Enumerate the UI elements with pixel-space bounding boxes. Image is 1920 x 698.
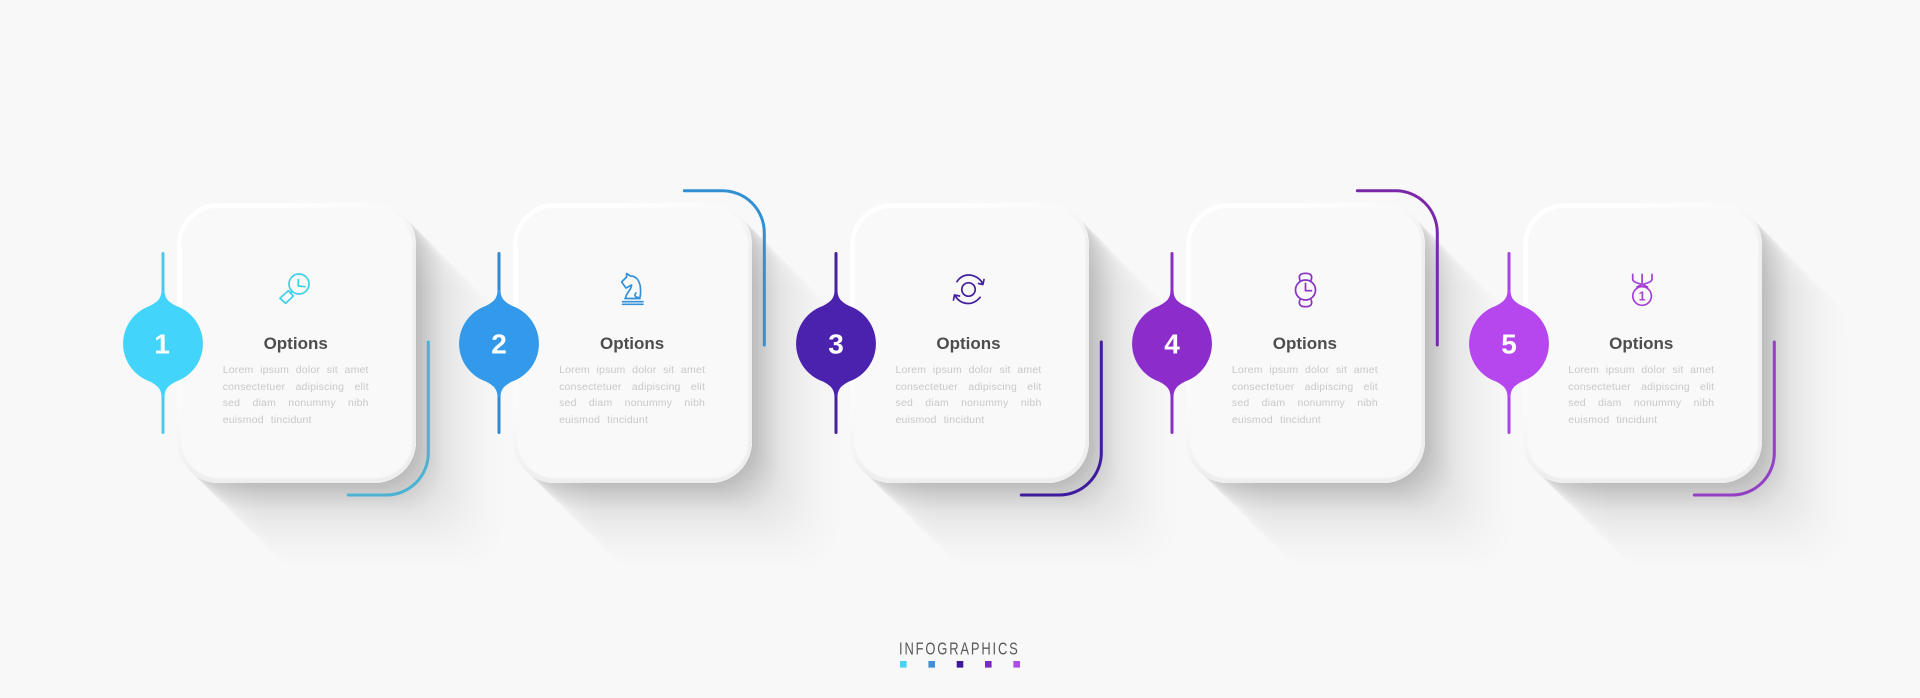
corner accent line bbox=[1356, 189, 1439, 346]
body text: euismod tincidunt bbox=[1568, 414, 1657, 426]
body text bbox=[1232, 364, 1378, 426]
step 3 panel bbox=[796, 222, 1142, 536]
body text: consectetuer adipiscing elit bbox=[559, 381, 705, 393]
card 5 with long shadow bbox=[1523, 203, 1762, 483]
number pin 5 bbox=[1469, 252, 1549, 434]
body text: euismod tincidunt bbox=[1232, 414, 1321, 426]
step 5 panel bbox=[1469, 222, 1815, 536]
body text: consectetuer adipiscing elit bbox=[1568, 381, 1714, 393]
body text: sed diam nonummy nibh bbox=[559, 397, 705, 409]
body text: sed diam nonummy nibh bbox=[1568, 397, 1714, 409]
body text: sed diam nonummy nibh bbox=[895, 397, 1041, 409]
card 4 with long shadow bbox=[1186, 203, 1425, 483]
step 1 panel bbox=[123, 222, 469, 536]
icon: chess knight bbox=[620, 272, 644, 306]
body text bbox=[895, 364, 1042, 426]
icon: medal with number one bbox=[1632, 274, 1653, 306]
heading: Options bbox=[600, 334, 664, 353]
icon: wristwatch bbox=[1294, 272, 1316, 308]
body text: Lorem ipsum dolor sit amet bbox=[1568, 364, 1714, 376]
number pin 1 bbox=[123, 252, 203, 434]
body text: consectetuer adipiscing elit bbox=[895, 381, 1041, 393]
icon: medal with number one: 1 bbox=[1638, 290, 1645, 304]
body text: euismod tincidunt bbox=[895, 414, 984, 426]
step 2 panel bbox=[459, 189, 805, 536]
colour squares bbox=[900, 661, 1020, 668]
heading: Options bbox=[264, 334, 328, 353]
number pin 2: 2 bbox=[492, 329, 507, 360]
corner accent line bbox=[1020, 340, 1103, 496]
number pin 5: 5 bbox=[1501, 329, 1516, 360]
body text: euismod tincidunt bbox=[223, 414, 312, 426]
number pin 4 bbox=[1132, 252, 1212, 434]
body text: euismod tincidunt bbox=[559, 414, 648, 426]
heading: Options bbox=[1609, 334, 1673, 353]
icon: magnifier with clock bbox=[279, 273, 310, 304]
body text bbox=[223, 364, 369, 426]
body text: consectetuer adipiscing elit bbox=[223, 381, 369, 393]
number pin 3 bbox=[796, 252, 876, 434]
body text: consectetuer adipiscing elit bbox=[1232, 381, 1378, 393]
heading: Options bbox=[936, 334, 1001, 353]
card 2 with long shadow bbox=[513, 203, 752, 483]
card 1 with long shadow bbox=[177, 203, 416, 483]
corner accent line bbox=[346, 340, 430, 496]
number pin 4: 4 bbox=[1164, 329, 1180, 360]
body text: Lorem ipsum dolor sit amet bbox=[895, 364, 1041, 376]
number pin 2 bbox=[459, 252, 539, 434]
body text bbox=[1568, 364, 1714, 426]
number pin 1: 1 bbox=[154, 329, 170, 360]
corner accent line bbox=[1692, 340, 1776, 496]
card 3 with long shadow bbox=[850, 203, 1089, 483]
number pin 3: 3 bbox=[828, 329, 844, 360]
footer: infographics wordmark with colour squares bbox=[899, 640, 1020, 668]
body text: Lorem ipsum dolor sit amet bbox=[559, 364, 705, 376]
body text: Lorem ipsum dolor sit amet bbox=[223, 364, 369, 376]
body text: Lorem ipsum dolor sit amet bbox=[1232, 364, 1378, 376]
heading: Options bbox=[1273, 334, 1337, 353]
icon: cycle arrows around circle bbox=[952, 274, 985, 304]
wordmark: INFOGRAPHICS bbox=[899, 640, 1020, 659]
step 4 panel bbox=[1132, 189, 1478, 536]
body text bbox=[559, 364, 705, 426]
corner accent line bbox=[682, 189, 766, 346]
body text: sed diam nonummy nibh bbox=[223, 397, 369, 409]
body text: sed diam nonummy nibh bbox=[1232, 397, 1378, 409]
